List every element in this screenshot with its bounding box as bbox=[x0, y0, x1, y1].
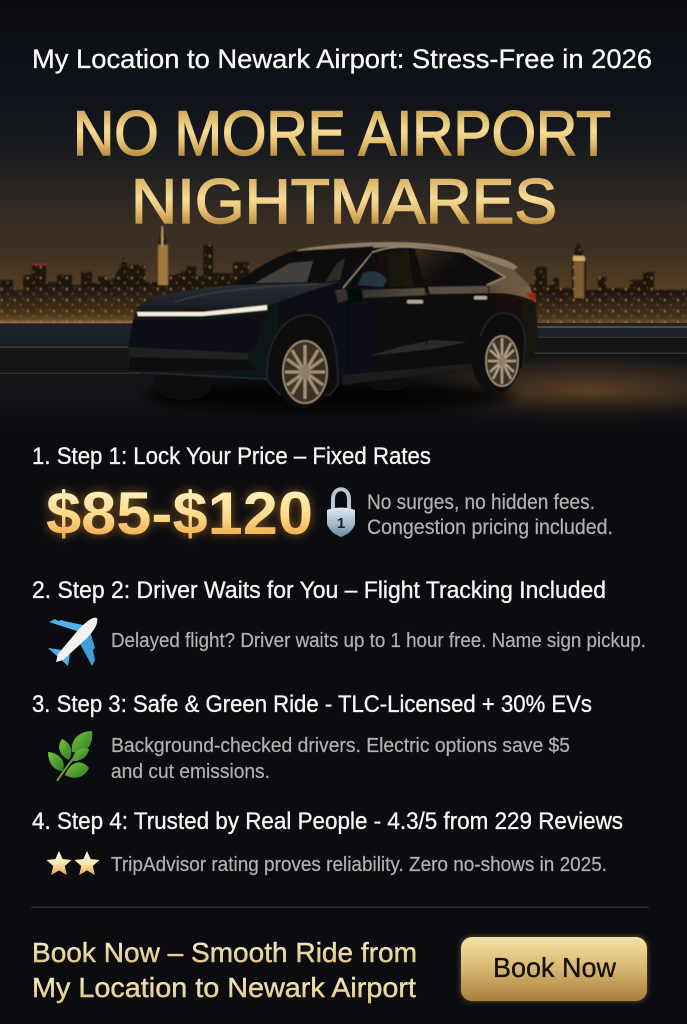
step 3 heading: 3. Step 3: Safe & Green Ride - TLC-Licensed + 30% EVs bbox=[32, 691, 592, 718]
bumper band bbox=[128, 347, 248, 360]
road and barrier bbox=[0, 347, 687, 432]
hero scene: night skyline and road bbox=[0, 84, 687, 418]
belt line reflection bbox=[362, 288, 427, 298]
book now button bbox=[461, 937, 647, 1001]
front face grille bbox=[128, 314, 266, 353]
skyline bbox=[0, 225, 687, 323]
step 1 description: Congestion pricing included. bbox=[367, 516, 613, 539]
water bbox=[0, 323, 687, 347]
door handles bbox=[407, 300, 423, 304]
step 3 bbox=[32, 691, 592, 783]
far wheels bbox=[155, 372, 212, 400]
SUV car bbox=[127, 242, 537, 412]
step 2 heading: 2. Step 2: Driver Waits for You – Flight Tracking Included bbox=[32, 577, 606, 604]
call to action text: Book Now – Smooth Ride from bbox=[32, 937, 417, 968]
step 2 bbox=[32, 577, 646, 666]
sill bbox=[343, 363, 478, 385]
icon: padlock: 1 bbox=[337, 515, 345, 532]
hood bbox=[137, 282, 340, 312]
book now button: Book Now bbox=[493, 952, 617, 983]
headline bbox=[73, 99, 611, 237]
step 3 description: and cut emissions. bbox=[111, 761, 270, 783]
icon: padlock bbox=[327, 489, 355, 537]
step 4 bbox=[32, 808, 623, 876]
icon: two stars bbox=[46, 851, 100, 875]
subtitle: My Location to Newark Airport: Stress-Free in 2026 bbox=[32, 44, 652, 74]
step 1 bbox=[32, 443, 613, 547]
C pillar bbox=[463, 252, 531, 288]
rear wheel bbox=[472, 313, 525, 393]
headline: NO MORE AIRPORT bbox=[73, 99, 611, 169]
step 3 description bbox=[111, 735, 570, 783]
step 2 description: Delayed flight? Driver waits up to 1 hour free. Name sign pickup. bbox=[111, 630, 646, 652]
icon: airplane bbox=[48, 618, 97, 666]
front wheel bbox=[267, 315, 338, 408]
running light bbox=[137, 305, 267, 316]
headline: NIGHTMARES bbox=[131, 167, 557, 237]
rear quarter reflection bbox=[488, 285, 536, 302]
door seams bbox=[348, 286, 492, 372]
body bbox=[127, 242, 537, 385]
call to action text bbox=[32, 937, 417, 1003]
step 1 description bbox=[367, 491, 613, 539]
price: $85-$120 bbox=[46, 480, 313, 547]
windshield bbox=[233, 246, 374, 285]
step 1 description: No surges, no hidden fees. bbox=[367, 491, 595, 514]
car shadow bbox=[145, 380, 515, 412]
mirror bbox=[348, 272, 387, 302]
call to action text: My Location to Newark Airport bbox=[32, 972, 416, 1003]
tail light bbox=[525, 293, 536, 303]
step 3 description: Background-checked drivers. Electric options save $5 bbox=[111, 735, 570, 757]
price: $85-$120 bbox=[46, 480, 313, 547]
step 4 heading: 4. Step 4: Trusted by Real People - 4.3/5 from 229 Reviews bbox=[32, 808, 623, 835]
fog light bbox=[218, 328, 255, 334]
side windows with chrome bbox=[343, 247, 505, 288]
icon: leaf sprig bbox=[48, 731, 92, 781]
step 4 description: TripAdvisor rating proves reliability. Zero no-shows in 2025. bbox=[111, 854, 607, 876]
step 1 heading: 1. Step 1: Lock Your Price – Fixed Rates bbox=[32, 443, 431, 470]
roof highlight bbox=[297, 242, 518, 270]
